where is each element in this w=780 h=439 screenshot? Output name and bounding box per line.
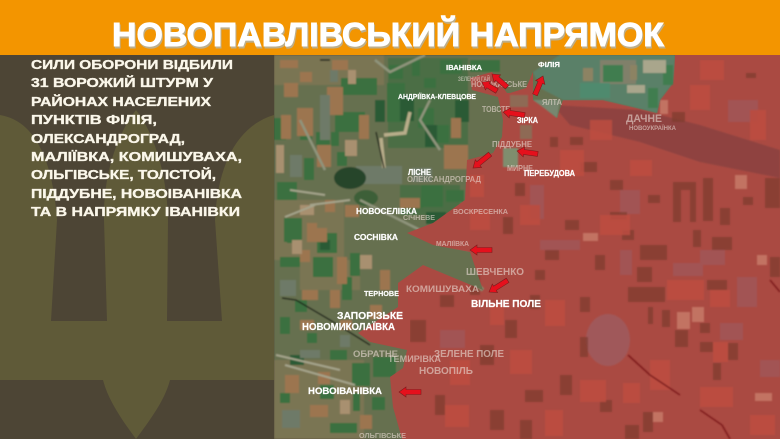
text block: summary of repelled assaults: 31 ВОРОЖИЙ ШТУРМ У: [31, 75, 214, 90]
text block: summary of repelled assaults: ОЛЕКСАНДРОГРАД,: [31, 131, 185, 146]
text block: summary of repelled assaults: МАЛІЇВКА, КОМИШУВАХА,: [31, 149, 242, 164]
map labels: settlements: СІЧНЕВЕ: [403, 213, 435, 222]
map labels: settlements: НОВОМИКОЛАЇВКА: [302, 320, 395, 333]
icon: trident emblem watermark: [0, 110, 274, 439]
terrain: unoccupied patch north-east: [533, 55, 675, 118]
arrow: Komyshuvakha: [486, 276, 510, 296]
text block: summary of repelled assaults: ПІДДУБНЕ, НОВОІВАНІВКА: [31, 186, 243, 201]
text block: summary of repelled assaults: ОЛЬГІВСЬКЕ, ТОЛСТОЙ,: [31, 167, 216, 182]
arrows: assault directions: [399, 70, 548, 397]
text block: summary of repelled assaults: [31, 57, 243, 219]
panel: left text panel: [0, 55, 274, 439]
map labels: settlements: НОВОУКРАЇНКА: [629, 124, 676, 132]
map labels: settlements: ФІЛІЯ: [538, 60, 560, 69]
arrow: Tovste: [502, 107, 525, 120]
map labels: settlements: ОЛЕКСАНДРОГРАД: [407, 175, 481, 184]
map labels: settlements: ПЕРЕБУДОВА: [524, 169, 575, 178]
arrow: Novokatske upper: [489, 70, 510, 91]
map labels: settlements: НОВОСЕЛІВКА: [356, 206, 417, 216]
arrow: Piddubne: [516, 146, 538, 159]
arrow: Novoivanivka: [399, 387, 421, 397]
map labels: settlements: ПІДДУБНЕ: [492, 140, 533, 149]
map: satellite terrain with occupied zone: [274, 55, 780, 439]
text block: summary of repelled assaults: СИЛИ ОБОРОНИ ВІДБИЛИ: [31, 57, 233, 72]
map labels: settlements: СОСНІВКА: [354, 232, 398, 242]
map labels: settlements: ЗЕЛЕНЕ ПОЛЕ: [434, 349, 504, 360]
map labels: settlements: ЗАПОРІЗЬКЕ: [337, 311, 403, 322]
terrain: forest: [334, 167, 366, 189]
map labels: settlements: НОВОКАТСЬКЕ: [471, 80, 528, 89]
terrain: unoccupied farmland: [274, 55, 684, 439]
header bar: [0, 0, 780, 55]
map labels: settlements: МАЛІЇВКА: [436, 240, 469, 248]
map labels: settlements: АНДРІЇВКА-КЛЕВЦОВЕ: [398, 92, 476, 101]
arrow: Novokatske lower: [479, 78, 500, 95]
map labels: settlements: ЗЕЛЕНИЙ ГАЙ: [458, 74, 490, 83]
map labels: settlements: КОМИШУВАХА: [406, 284, 479, 295]
map labels: settlements: ВІЛЬНЕ ПОЛЕ: [471, 299, 541, 310]
map labels: settlements: ТОВСТЕ: [482, 105, 511, 114]
text block: summary of repelled assaults: РАЙОНАХ НАСЕЛЕНИХ: [31, 94, 211, 109]
map labels: settlements: ЛІСНЕ: [408, 168, 432, 177]
text block: summary of repelled assaults: ТА В НАПРЯМКУ ІВАНІВКИ: [31, 204, 240, 219]
map labels: settlements: ІВАНІВКА: [446, 63, 483, 72]
arrow: Maliivka: [470, 245, 492, 255]
arrow: Filia: [530, 74, 548, 97]
map labels: settlements: НОВОІВАНІВКА: [308, 386, 383, 396]
map labels: settlements: НОВОПІЛЬ: [419, 365, 473, 377]
title: НОВОПАВЛІВСЬКИЙ НАПРЯМОК: [112, 15, 665, 53]
terrain: occupied red zone: [358, 55, 780, 439]
map labels: settlements: ОБРАТНЕ: [353, 349, 398, 360]
map labels: settlements: МИРНЕ: [507, 164, 534, 173]
map labels: settlements: ШЕВЧЕНКО: [466, 266, 524, 278]
map labels: settlements: ЗІРКА: [517, 116, 538, 125]
map labels: settlements: ВОСКРЕСЕНКА: [453, 207, 509, 216]
map labels: settlements: ДАЧНЕ: [626, 113, 662, 125]
map labels: settlements: ТЕРНОВЕ: [364, 289, 399, 298]
map labels: settlements: [302, 60, 676, 439]
text block: summary of repelled assaults: ПУНКТІВ ФІЛІЯ,: [31, 112, 157, 127]
map labels: settlements: ТЕМИРІВКА: [388, 354, 441, 364]
arrow: Oleksandrohrad: [470, 150, 493, 172]
map labels: settlements: ЯЛТА: [542, 98, 562, 107]
